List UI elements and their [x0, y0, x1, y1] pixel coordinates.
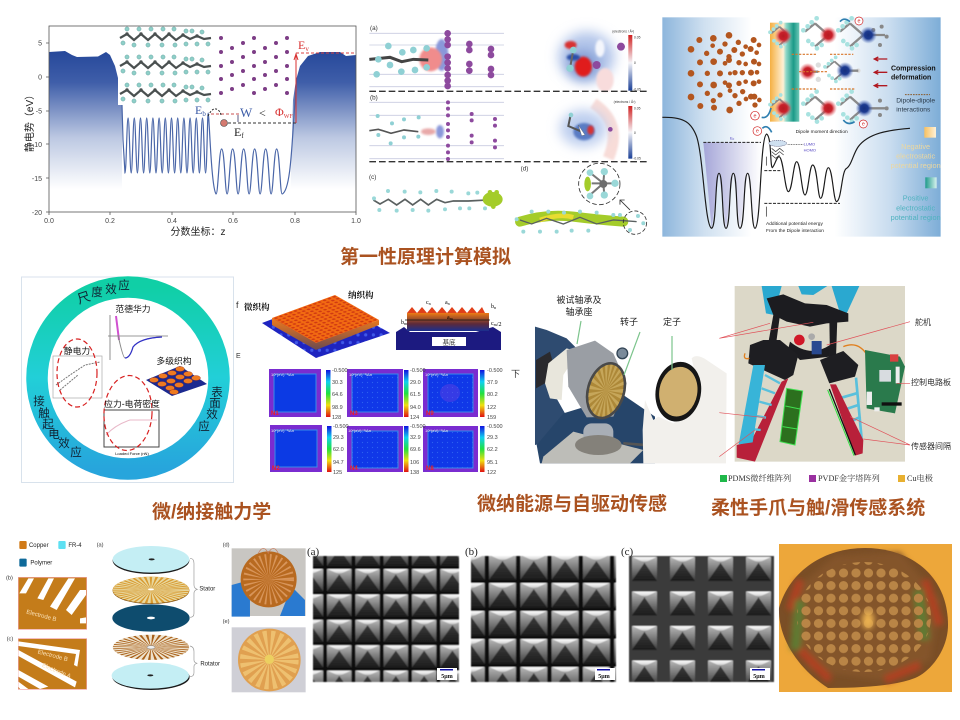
cross section: c: [426, 300, 429, 306]
orbital levels: [730, 135, 816, 217]
sub-labels: (a): [97, 542, 104, 548]
captions: From the Dipole interaction: [766, 228, 824, 234]
substrate slab: [262, 298, 390, 358]
x axis label: 分数坐标：z: [170, 225, 226, 238]
SEM b: (b): [465, 546, 478, 558]
cross section: n: [448, 301, 450, 306]
wafer disc: [779, 548, 948, 688]
electrode A and B detail: Electrode A: [41, 663, 72, 680]
electrode A and B detail: [18, 639, 87, 689]
colour scale values: 61.5: [410, 392, 421, 398]
material legend: FR-4: [68, 543, 82, 549]
heat map N3: N3: [350, 411, 358, 417]
heat map N9: [423, 369, 478, 417]
colour bar a: -0.05: [633, 88, 641, 92]
heat map N4: N4: [350, 466, 358, 472]
labels: (b): [370, 94, 378, 101]
y axis label: 静电势（eV）: [23, 90, 36, 152]
cross section: [396, 300, 501, 350]
heat map N8: N8: [426, 466, 434, 472]
inner labels: 应力-电荷密度: [104, 398, 160, 409]
cross section: n: [494, 305, 496, 310]
dipole legend: interactions: [896, 107, 931, 114]
energy levels: [703, 142, 840, 203]
charged balls: [775, 26, 877, 117]
tick labels: -5: [36, 108, 42, 116]
heat map N2: [270, 425, 322, 472]
colour bar a: [612, 28, 641, 92]
label nano: 纳织构: [348, 290, 374, 300]
colour scale values: [332, 368, 503, 476]
sensor array: [780, 388, 803, 445]
energy well: [703, 142, 761, 228]
dashed zoom circles and arrow: [579, 163, 647, 234]
colour scale values: 124: [410, 415, 419, 421]
labels: (c): [369, 174, 376, 181]
SEM b: 5μm: [598, 674, 610, 680]
colour bar b: (electrons / Å³): [614, 99, 635, 104]
bearing labels: 轴承座: [565, 306, 593, 317]
brackets: [190, 558, 197, 677]
CF3 head: [584, 168, 619, 199]
gripper labels: [911, 317, 951, 451]
compression label: [891, 66, 936, 82]
stress plot: [104, 410, 159, 456]
colour scale values: 32.9: [410, 435, 421, 441]
colour scale values: 69.6: [410, 447, 421, 453]
colour scale values: -0.500: [487, 368, 503, 374]
stray cropped marks: 下: [511, 369, 520, 379]
wire: [744, 345, 873, 368]
colour bar b: 0: [634, 131, 636, 135]
servo: [794, 333, 822, 354]
inner labels: 范德华力: [115, 303, 151, 314]
photo e: [232, 627, 306, 692]
captions: Dipole moment direction: [796, 129, 848, 135]
ring labels: 效: [105, 282, 117, 296]
left ribs: [754, 375, 780, 430]
colour bar a: 0.05: [634, 35, 641, 39]
grid lines: [369, 33, 504, 159]
energy annotations: f: [241, 132, 244, 140]
electron circles: e: [754, 113, 757, 119]
photo: wafer: [779, 544, 952, 692]
photo d: [232, 548, 306, 617]
ring labels: 应: [70, 445, 82, 459]
heat map N3: [347, 369, 403, 417]
material legend: Polymer: [30, 561, 52, 567]
collar: [545, 348, 578, 400]
ring labels: [33, 278, 223, 459]
left mount: [748, 340, 798, 380]
left cyan finger: [739, 365, 765, 444]
electron circles: e: [857, 19, 860, 25]
right cyan frame: [839, 378, 862, 439]
photo: soft gripper: [719, 286, 910, 462]
label micro: 微织构: [244, 302, 270, 312]
SEM c: (c): [621, 546, 634, 558]
ring labels: 电: [48, 428, 60, 441]
ring labels: 触: [38, 406, 50, 420]
colour scale values: 62.0: [333, 447, 344, 453]
stator disc: [651, 358, 706, 425]
legend swatches and text: Positive: [903, 194, 928, 203]
heat map N8: [423, 426, 478, 472]
molecule b with density: [369, 114, 444, 145]
ring labels: 起: [42, 418, 54, 431]
background: [735, 286, 905, 462]
base plate: [542, 432, 643, 463]
dipole legend: Dipole-dipole: [896, 97, 935, 104]
legend swatches and text: potential region: [891, 161, 941, 170]
bearing labels: 转子: [620, 316, 638, 327]
colour scale values: 64.6: [332, 392, 343, 398]
gripper legend: Cu电极: [907, 473, 933, 483]
panel: charge density difference: [369, 25, 647, 234]
cross section: a: [447, 315, 450, 321]
wafer tint: [790, 552, 940, 680]
heat map N8: 10ⁿ(eV)⁻¹/Δn: [425, 428, 448, 433]
molecule a with density: [369, 39, 448, 78]
bolt: [617, 348, 628, 359]
inner labels: 静电力: [64, 345, 90, 356]
right mount: [820, 351, 858, 383]
energy annotations: [195, 38, 356, 140]
van der Waals plot: [108, 315, 168, 360]
sensor mount: [575, 423, 645, 455]
colour bar b: 0.05: [634, 106, 641, 110]
tick labels: 0: [38, 74, 42, 82]
cross section: m: [404, 321, 408, 326]
ring labels: 尺: [75, 289, 92, 307]
colour bar a: (electrons / Å³): [612, 28, 634, 33]
molecular chains: [120, 27, 211, 103]
energy annotations: <: [259, 106, 266, 120]
legend swatches and text: electrostatic: [896, 151, 936, 160]
heat map N2: N2: [272, 466, 280, 472]
colour scale values: 128: [332, 415, 341, 421]
SEM a: (a): [307, 546, 320, 558]
ring labels: 效: [58, 436, 70, 450]
electron circles: e: [756, 129, 759, 135]
heat map N1: 10ⁿ(eV)⁻¹/Δn: [271, 372, 294, 377]
ring labels: 效: [206, 407, 218, 421]
tick labels: -20: [32, 210, 42, 217]
sub-labels: (b): [6, 576, 13, 582]
metal atoms: [219, 36, 289, 95]
ring labels: 应: [198, 419, 210, 433]
dashed separators: [369, 91, 647, 162]
electrode A and B detail: Electrode B: [37, 649, 68, 663]
stray cropped marks: [236, 300, 520, 379]
chart: electrostatic potential: [23, 26, 361, 238]
captions: [766, 129, 848, 234]
heat map N1: [269, 369, 321, 417]
cross section: m: [450, 316, 454, 321]
heat map b: [560, 103, 613, 158]
colour scale values: 159: [487, 415, 496, 421]
tick labels: 0.0: [44, 218, 54, 225]
colour scale values: 80.2: [487, 392, 498, 398]
chain d: [515, 210, 645, 234]
frame: [22, 277, 234, 482]
metal housing: [567, 341, 627, 417]
stray cropped marks: f: [236, 300, 239, 310]
gripper labels: 舵机: [915, 317, 931, 327]
bearing labels: 被试轴承及: [556, 294, 602, 305]
labels: [369, 25, 528, 181]
SEM a: [307, 546, 459, 682]
heat map N3: 10ⁿ(eV)⁻¹/Δn: [349, 372, 372, 377]
glove: [643, 356, 727, 463]
colour scale values: 29.3: [487, 435, 498, 441]
energy annotations: W: [240, 105, 253, 120]
orbital levels: HOMO: [804, 148, 816, 153]
polymer disc: [112, 604, 190, 632]
hierarchical structure icon: [146, 366, 207, 396]
photo: bearing test rig: [535, 327, 727, 463]
colour scale values: 98.9: [332, 405, 343, 411]
electrode B detail: [18, 577, 87, 629]
panel: micro/nano structure: [236, 290, 520, 476]
captions: Additional potential energy: [766, 221, 823, 227]
electron circles: e: [862, 122, 865, 128]
plate top: [272, 295, 379, 343]
energy annotations: E: [298, 38, 305, 52]
ring labels: 表: [211, 385, 223, 399]
electrode B detail: Electrode B: [25, 609, 57, 623]
legend swatches and text: Negative: [901, 142, 930, 151]
bracket labels: Stator: [199, 586, 215, 592]
right red finger: [830, 384, 863, 456]
inner labels: 多级织构: [156, 355, 192, 366]
tick labels: 1.0: [351, 218, 361, 225]
heat map a: [558, 32, 625, 92]
dipole strip: [770, 23, 799, 122]
colour bar b: [614, 99, 641, 160]
colour bar a: 0: [634, 61, 636, 65]
legend swatches and text: electrostatic: [896, 203, 936, 212]
orbital levels: LUMO: [804, 142, 815, 147]
legend swatches and text: potential region: [891, 213, 941, 222]
gripper labels: 传感器间隔: [911, 441, 951, 451]
colour scale values: -0.500: [333, 424, 349, 430]
material legend: [19, 541, 82, 567]
energy annotations: Φ: [275, 105, 284, 119]
colour scale values: 30.3: [332, 380, 343, 386]
transfer arrows: [762, 19, 855, 132]
wafer dies: [797, 562, 931, 672]
panel: TENG structure: [6, 541, 306, 692]
axes: [46, 26, 356, 215]
background: [662, 17, 941, 237]
colour bars: [326, 370, 484, 472]
tick labels: -10: [32, 142, 42, 149]
heat map N2: 10ⁿ(eV)⁻¹/Δn: [271, 428, 294, 433]
FR-4 disc: [113, 546, 189, 574]
left red finger: [737, 378, 788, 462]
molecules: [768, 16, 889, 124]
ring labels: 度: [91, 285, 103, 299]
dipole arrows: [792, 54, 855, 89]
SEM a: 5μm: [441, 674, 453, 680]
gripper legend: PDMS微纤维阵列: [728, 473, 791, 483]
ring labels: 接: [33, 395, 45, 408]
labels: (a): [370, 25, 378, 32]
colour scale values: -0.500: [410, 368, 426, 374]
gloves: [762, 286, 859, 315]
colour scale values: 29.0: [410, 380, 421, 386]
metal atoms b: [446, 100, 497, 161]
chain c: [372, 189, 503, 213]
legend swatches and text: [891, 127, 941, 222]
SEM c: [621, 546, 774, 682]
labels: (d): [521, 165, 528, 172]
cross section: c: [491, 321, 494, 327]
colour scale values: 122: [487, 470, 496, 476]
bearing labels: [556, 294, 681, 327]
tick labels: 0.8: [290, 218, 300, 225]
title: micro/nano contact mechanics: 微/纳接触力学: [152, 500, 271, 523]
compression label: Compression: [891, 66, 936, 73]
tick labels: 0.2: [105, 218, 115, 225]
colour scale values: 94.7: [333, 460, 344, 466]
bright spot: [862, 611, 874, 629]
table: [537, 395, 655, 463]
colour scale values: 37.9: [487, 380, 498, 386]
SEM b: [465, 546, 616, 682]
colour bar b: -0.05: [633, 156, 641, 160]
tick labels: [32, 40, 361, 225]
colour scale values: -0.500: [332, 368, 348, 374]
colour scale values: -0.500: [487, 424, 503, 430]
shaft housing: [535, 327, 577, 445]
ring: [37, 287, 219, 469]
stress plot: Loaded Force (nN): [115, 451, 149, 456]
copper atoms: [688, 32, 762, 113]
electron circles: [751, 17, 867, 135]
panel: dipole mechanism: [662, 16, 941, 237]
right sensor strip: [828, 390, 854, 456]
shaft: [536, 352, 557, 388]
electrostatic plot: [53, 356, 102, 398]
ring labels: 面: [209, 398, 221, 410]
title: first-principles simulation: 第一性原理计算模拟: [340, 245, 511, 268]
inner labels: [64, 303, 192, 409]
energy annotations: WF: [284, 114, 293, 120]
potential curve: [662, 117, 910, 228]
cross section: n: [429, 301, 431, 306]
heat map N4: [347, 426, 403, 472]
sub-labels: (d): [223, 542, 230, 548]
rotator electrode disc: [113, 635, 189, 660]
colour scale values: -0.500: [410, 424, 426, 430]
colour scale values: 122: [487, 405, 496, 411]
colour scale values: 29.3: [333, 435, 344, 441]
metal ring: [579, 357, 633, 424]
heat map N9: 10ⁿ(eV)⁻¹/Δn: [425, 372, 448, 377]
compression arrows: [874, 57, 887, 88]
red leader lines: [719, 322, 910, 457]
bearing labels: 定子: [663, 316, 681, 327]
heat map N1: N1: [271, 411, 279, 417]
cross section: 基底: [442, 338, 456, 346]
gripper legend: PVDF金字塔阵列: [818, 473, 880, 483]
title: micro-nano energy and self-powered sensing: 微纳能源与自驱动传感: [477, 493, 667, 515]
material legend: Copper: [29, 543, 49, 549]
gripper legend: [720, 473, 933, 483]
sub-labels: (e): [223, 619, 230, 625]
panel: SEM images: [307, 546, 774, 682]
cross section: m: [494, 322, 498, 327]
sub-labels: (c): [7, 637, 13, 643]
panel: contact mechanics ring: [22, 277, 234, 482]
tick labels: 0.4: [167, 218, 177, 225]
colour scale values: 138: [410, 470, 419, 476]
energy annotations: b: [202, 110, 206, 118]
FR-4 rotator disc: [112, 663, 190, 690]
gripper labels: 控制电路板: [911, 377, 951, 387]
cross section: b: [401, 320, 404, 326]
title: flexible gripper and tactile sensing: 柔性手爪与触/滑传感系统: [711, 496, 925, 519]
energy annotations: v: [305, 45, 309, 53]
colour scale values: 95.1: [487, 460, 498, 466]
compression label: deformation: [891, 75, 931, 82]
metal atoms a: [444, 30, 494, 89]
colour scale values: 106: [410, 460, 419, 466]
orbital levels: F: [733, 137, 735, 141]
bracket labels: [199, 586, 220, 667]
heat map N9: N9: [426, 411, 434, 417]
colour scale values: 94.0: [410, 405, 421, 411]
green leader lines: [577, 321, 672, 375]
SEM c: 5μm: [753, 674, 765, 680]
potential curve: [122, 90, 296, 194]
heat map N4: 10ⁿ(eV)⁻¹/Δn: [348, 428, 371, 433]
orbital levels: E: [730, 135, 733, 140]
copper stator disc: [113, 577, 189, 604]
cross section: /2: [497, 322, 501, 328]
circuit board: [865, 350, 905, 413]
sub-labels: [6, 542, 230, 643]
dipole legend: [896, 95, 935, 114]
tick labels: 0.6: [228, 218, 238, 225]
ring labels: 应: [118, 278, 130, 292]
energy annotations: E: [234, 125, 241, 139]
wafer background: [779, 544, 952, 692]
energy annotations: E: [195, 103, 202, 117]
plot background areas: [49, 26, 356, 212]
tick labels: -15: [32, 176, 42, 183]
bracket labels: Rotator: [200, 661, 220, 667]
cross section: a: [445, 300, 448, 306]
colour scale values: 125: [333, 470, 342, 476]
servo frame: [767, 294, 848, 360]
colour scale values: 62.2: [487, 447, 498, 453]
red dashed ellipses: [57, 339, 154, 452]
stray cropped marks: E: [236, 353, 241, 360]
tick labels: 5: [38, 40, 42, 48]
cross section: b: [491, 304, 494, 310]
plate side: [272, 318, 379, 350]
